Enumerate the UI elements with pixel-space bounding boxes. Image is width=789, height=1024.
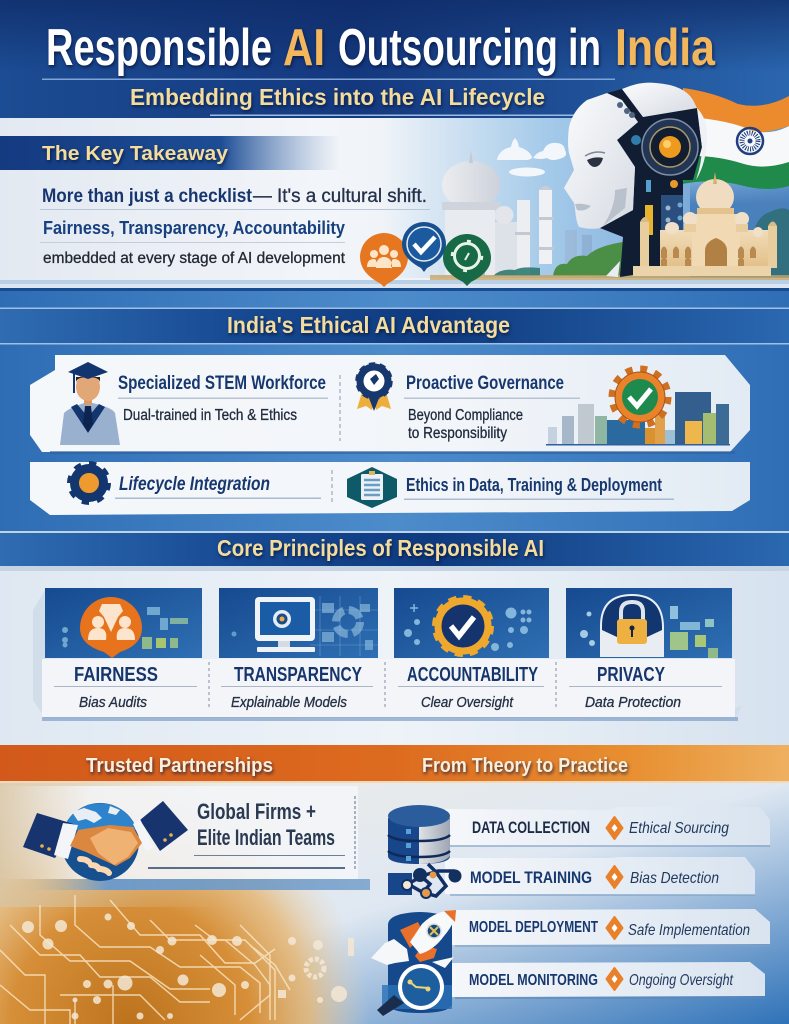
illustration: sky clouds: [497, 138, 566, 176]
subtitle: Embedding Ethics into the AI Lifecycle: [130, 84, 545, 110]
card: fairness: [45, 588, 202, 658]
illustration: circuit nodes: [22, 914, 354, 1020]
illustration: golden taj mahal: [633, 172, 777, 276]
row: model deployment: [452, 909, 770, 947]
text: global firms: Global Firms +: [197, 799, 316, 824]
panel: principles labels: [33, 590, 742, 721]
text: lifecycle integration: Lifecycle Integration: [119, 474, 270, 495]
section background: core principles: [0, 531, 789, 746]
icon: governance rosette: [357, 364, 391, 411]
panel: key takeaway: [0, 118, 789, 290]
icon: graduate: [60, 362, 120, 445]
text: proactive governance: Beyond Compliance: [408, 407, 523, 424]
row: model training: MODEL TRAINING: [470, 868, 592, 887]
illustration: white taj mahal: [442, 150, 592, 275]
icon: magnifier: [377, 964, 444, 1016]
row: model monitoring: MODEL MONITORING: [469, 972, 598, 989]
text: proactive governance: Proactive Governance: [406, 372, 564, 394]
row: model deployment: Safe Implementation: [628, 922, 750, 939]
row: model monitoring: [452, 962, 765, 999]
icon: globe and handshake: [23, 801, 188, 881]
illustration: city skyline: [546, 392, 730, 446]
section background: advantage: [0, 288, 789, 534]
text: proactive governance: [404, 372, 580, 442]
row: model monitoring: Ongoing Oversight: [629, 972, 733, 989]
text block: key takeaway: embedded at every stage of AI development: [43, 250, 346, 267]
heading: the key takeaway: The Key Takeaway: [42, 143, 229, 165]
text: accountability: Clear Oversight: [421, 695, 514, 711]
heading: trusted partnerships: Trusted Partnerships: [86, 754, 273, 777]
panel: advantage top row: [30, 355, 750, 454]
text: transparency: Explainable Models: [231, 695, 347, 711]
icon: orange people pin: [360, 233, 408, 287]
text: privacy: [569, 664, 722, 711]
text: transparency: TRANSPARENCY: [234, 664, 363, 686]
panel: advantage bottom row: [30, 462, 750, 515]
illustration: circuit background: [0, 895, 290, 1024]
text: specialized stem workforce: Specialized STEM Workforce: [118, 372, 326, 394]
row: data collection: Ethical Sourcing: [629, 820, 729, 837]
title: AI: [283, 19, 325, 77]
icon: lifecycle gear: [70, 464, 108, 502]
text: privacy: Data Protection: [585, 695, 681, 711]
illustration: trees and ground: [430, 208, 789, 280]
row: data collection: DATA COLLECTION: [472, 818, 590, 837]
text block: key takeaway: — It's a cultural shift.: [253, 186, 427, 207]
illustration: indian flag: [680, 88, 789, 189]
heading: from theory to practice: From Theory to Practice: [422, 754, 628, 777]
icon: rocket: [371, 910, 456, 968]
icon: database: [388, 805, 450, 864]
section background: partnerships and practice: [0, 745, 789, 1024]
panel: trusted partnerships: [0, 786, 370, 890]
text block: key takeaway: Fairness, Transparency, Accountability: [43, 218, 345, 238]
header background: [0, 0, 789, 120]
text: global firms: Elite Indian Teams: [197, 825, 335, 850]
card: privacy: [566, 588, 732, 658]
title: Responsible: [46, 19, 272, 77]
text: accountability: [398, 664, 544, 711]
icon: green compass pin: [443, 234, 491, 286]
row: model training: [445, 857, 755, 896]
text: global firms: [148, 799, 345, 869]
text: fairness: FAIRNESS: [74, 664, 158, 686]
text: transparency: [221, 664, 373, 711]
text: fairness: [54, 664, 197, 711]
icon: blue check pin: [402, 222, 446, 272]
row: model training: Bias Detection: [630, 870, 719, 887]
illustration: robot head: [564, 83, 707, 277]
title: India: [615, 19, 716, 77]
row: data collection: [445, 807, 770, 847]
icon: database backdrop for deployment and monitoring: [382, 912, 452, 1013]
icon: checklist hexagon: [347, 467, 397, 508]
title: Outsourcing in: [338, 19, 601, 77]
text block: key takeaway: [40, 186, 430, 267]
text: accountability: ACCOUNTABILITY: [407, 664, 538, 686]
text: fairness: Bias Audits: [79, 695, 147, 711]
text: specialized stem workforce: [118, 372, 328, 424]
icon: gear with check: [612, 369, 668, 425]
text: ethics in data, training and deployment: Ethics in Data, Training & Deployment: [406, 475, 662, 495]
text block: key takeaway: More than just a checklist: [42, 186, 253, 207]
row: model deployment: MODEL DEPLOYMENT: [469, 919, 598, 936]
text: specialized stem workforce: Dual-trained in Tech & Ethics: [123, 407, 297, 424]
icon: neural network: [388, 864, 462, 898]
title: [46, 19, 716, 77]
card: accountability: [394, 588, 549, 658]
heading: india's ethical ai advantage: India's Ethical AI Advantage: [227, 312, 510, 338]
heading: core principles: Core Principles of Responsible AI: [217, 535, 544, 561]
text: proactive governance: to Responsibility: [408, 425, 507, 442]
card: transparency: [219, 588, 378, 658]
text: privacy: PRIVACY: [597, 664, 666, 686]
